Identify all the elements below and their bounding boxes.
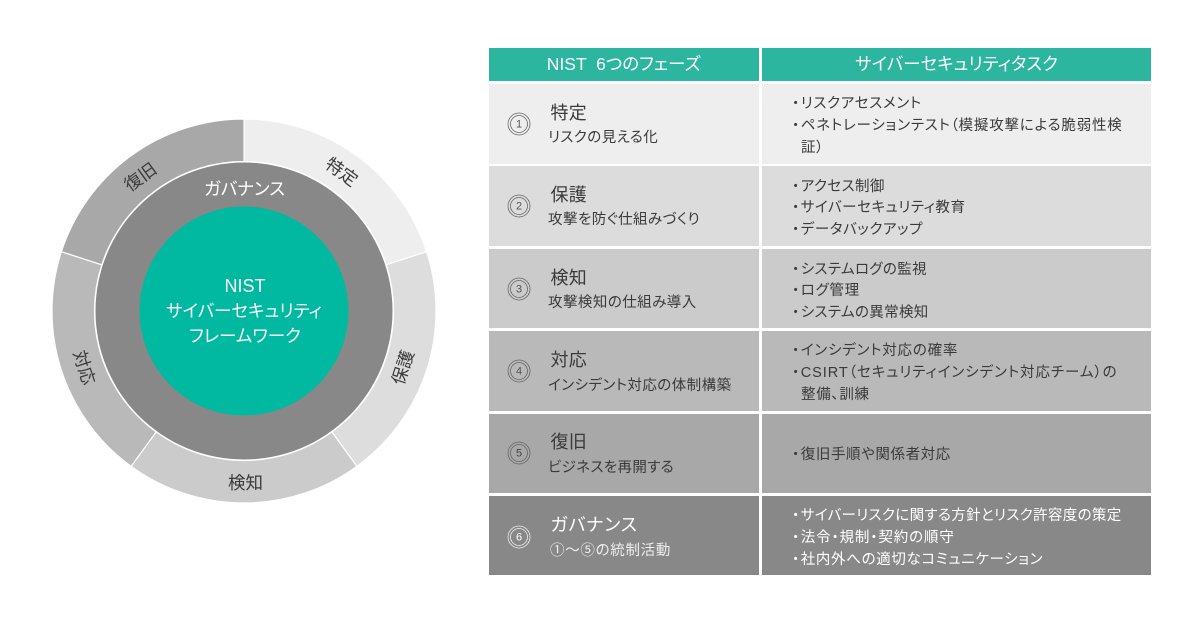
row 4 phase: 対応	[489, 331, 758, 410]
number badge 4: 4	[516, 366, 522, 378]
table header: phases: NIST 6つのフェーズ	[547, 54, 701, 74]
number badge 3	[508, 278, 530, 300]
row 3 phase: 検知	[489, 249, 758, 328]
row 1 tasks: 証）	[801, 140, 824, 156]
number badge 4	[508, 360, 530, 382]
number badge 1: 1	[516, 118, 522, 130]
center circle	[140, 206, 348, 416]
row 6 phase: ガバナンス	[489, 496, 758, 575]
row 3 tasks: ・システムの異常検知	[792, 305, 929, 321]
phase name: 対応	[550, 350, 587, 370]
number badge 2: 2	[516, 200, 522, 212]
phase description: ビジネスを再開する	[548, 460, 674, 476]
phase description: 攻撃を防ぐ仕組みづくり	[548, 212, 700, 228]
row 2 tasks: ・データバックアップ	[792, 222, 923, 238]
number badge 5: 5	[516, 448, 522, 460]
row 1 tasks: ・ペネトレーションテスト（模擬攻撃による脆弱性検	[792, 118, 1123, 134]
segment: 復旧	[61, 119, 244, 265]
row 2 tasks: ・アクセス制御	[792, 179, 885, 195]
row 4 tasks: ・インシデント対応の確率	[792, 343, 958, 359]
row 5 tasks	[762, 414, 1151, 492]
table header: phases	[489, 48, 758, 81]
row 2 phase: 保護	[489, 166, 758, 246]
row 5 tasks: ・復旧手順や関係者対応	[792, 447, 951, 463]
segment: 特定	[244, 119, 427, 265]
segment: 保護	[332, 252, 436, 466]
center circle: サイバーセキュリティ	[166, 301, 322, 321]
row 6 tasks: ・法令・規制・契約の順守	[792, 530, 955, 546]
segment: 対応: 対応	[69, 348, 99, 387]
row 4 tasks: ・CSIRT（セキュリティインシデント対応チーム）の	[792, 364, 1118, 380]
number badge 5	[508, 442, 530, 464]
number badge 6	[508, 526, 530, 548]
phase name: 復旧	[550, 432, 587, 452]
center circle: フレームワーク	[189, 326, 301, 346]
table header: tasks	[762, 48, 1151, 81]
row 5 phase: 復旧	[489, 414, 758, 492]
row 3 tasks	[762, 249, 1151, 328]
number badge 2	[508, 194, 530, 218]
segment: 対応	[52, 252, 156, 466]
number badge 3: 3	[516, 284, 522, 296]
phase name: 特定	[550, 103, 587, 123]
row 3 tasks: ・ログ管理	[792, 283, 860, 299]
phase description: インシデント対応の体制構築	[548, 378, 732, 394]
phase description: ①～⑤の統制活動	[550, 543, 671, 559]
row 3 tasks: ・システムログの監視	[792, 262, 927, 278]
wheel diagram: NIST framework	[52, 120, 436, 502]
phase description: リスクの見える化	[548, 130, 658, 146]
segment: 復旧: 復旧	[120, 159, 161, 195]
row 1 phase: 特定	[489, 84, 758, 164]
phase description: 攻撃検知の仕組み導入	[548, 295, 697, 311]
segment: 検知: 検知	[228, 473, 263, 493]
phase name: 保護	[550, 185, 587, 205]
segment: 保護: 保護	[388, 348, 418, 387]
center circle: NIST	[224, 276, 266, 296]
row 1 tasks: ・リスクアセスメント	[792, 96, 922, 112]
table header: tasks: サイバーセキュリティタスク	[855, 54, 1058, 74]
row 4 tasks	[762, 331, 1151, 410]
number badge 6: 6	[516, 532, 522, 544]
segment: 検知	[131, 432, 357, 503]
row 2 tasks: ・サイバーセキュリティ教育	[792, 200, 966, 216]
phase name: ガバナンス	[550, 515, 638, 535]
row 1 tasks	[762, 84, 1151, 164]
row 6 tasks: ・社内外への適切なコミュニケーション	[792, 552, 1043, 568]
row 4 tasks: 整備、訓練	[801, 386, 870, 402]
row 6 tasks	[762, 496, 1151, 575]
phase name: 検知	[550, 268, 587, 288]
segment: 特定: 特定	[321, 154, 362, 190]
row 2 tasks	[762, 166, 1151, 246]
number badge 1	[508, 112, 530, 136]
governance ring: ガバナンス	[204, 179, 285, 199]
governance ring	[96, 162, 392, 460]
row 6 tasks: ・サイバーリスクに関する方針とリスク許容度の策定	[792, 508, 1122, 524]
